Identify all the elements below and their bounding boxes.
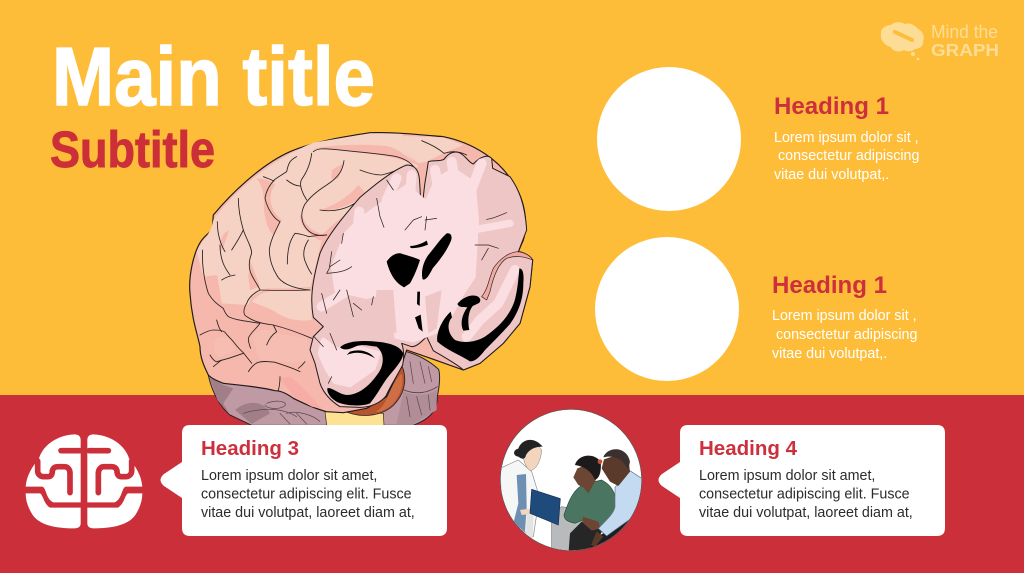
text block: heading 1 top: consectetur adipiscing (778, 148, 920, 164)
logo: Mind the Graph (881, 21, 999, 60)
callout box: heading 4: consectetur adipiscing elit. Fusce (699, 486, 910, 502)
text block: heading 1 bottom: Lorem ipsum dolor sit , (772, 308, 917, 324)
text block: heading 1 bottom: Heading 1 (772, 272, 887, 299)
circle placeholder 2 (595, 237, 739, 381)
circle placeholder 1 (597, 67, 741, 211)
ventricles (327, 233, 524, 406)
logo: Mind the Graph: GRAPH (931, 40, 999, 60)
coronal cross-section (310, 152, 533, 407)
background: red lower band (0, 395, 1024, 573)
text block: heading 1 bottom: vitae dui volutpat,. (772, 346, 887, 362)
callout box: heading 3: consectetur adipiscing elit. Fusce (201, 486, 412, 502)
callout box: heading 4: vitae dui volutpat, laoreet diam at, (699, 505, 913, 521)
cross-section sulci (314, 180, 507, 383)
cerebellum (208, 352, 440, 425)
callout box: heading 4: Lorem ipsum dolor sit amet, (699, 468, 875, 484)
doctor (500, 440, 543, 538)
text block: heading 1 bottom (772, 272, 918, 362)
brain illustration (190, 133, 533, 425)
callout box: heading 3: Heading 3 (201, 437, 299, 460)
sulci lines on the lateral surface (200, 141, 467, 391)
callout box: heading 4: Heading 4 (699, 437, 798, 460)
callout box: heading 3: Lorem ipsum dolor sit amet, (201, 468, 377, 484)
brain stem (325, 412, 384, 425)
callout box: heading 4 (658, 425, 945, 536)
title: Main title (52, 30, 375, 123)
text block: heading 1 top: vitae dui volutpat,. (774, 167, 889, 183)
logo: Mind the Graph: Mind the (931, 21, 998, 42)
background: yellow upper area (0, 0, 1024, 396)
callout box: heading 3: vitae dui volutpat, laoreet diam at, (201, 505, 415, 521)
icon: white brain (26, 434, 142, 528)
text block: heading 1 top (774, 93, 920, 183)
photo circle: doctor with couple (500, 409, 642, 557)
clipboard (530, 489, 560, 525)
woman (564, 456, 616, 557)
text block: heading 1 top: Lorem ipsum dolor sit , (774, 130, 919, 146)
callout box: heading 3 (160, 425, 447, 536)
subtitle: Subtitle (50, 121, 215, 178)
text block: heading 1 top: Heading 1 (774, 93, 889, 120)
temporal strip (482, 252, 533, 300)
text block: heading 1 bottom: consectetur adipiscing (776, 327, 918, 343)
chair (552, 507, 583, 553)
lateral surface of the brain (190, 133, 533, 413)
lobes: lighter gyri (197, 133, 463, 409)
white matter (320, 162, 515, 385)
midbrain (343, 365, 405, 415)
man (591, 449, 642, 548)
